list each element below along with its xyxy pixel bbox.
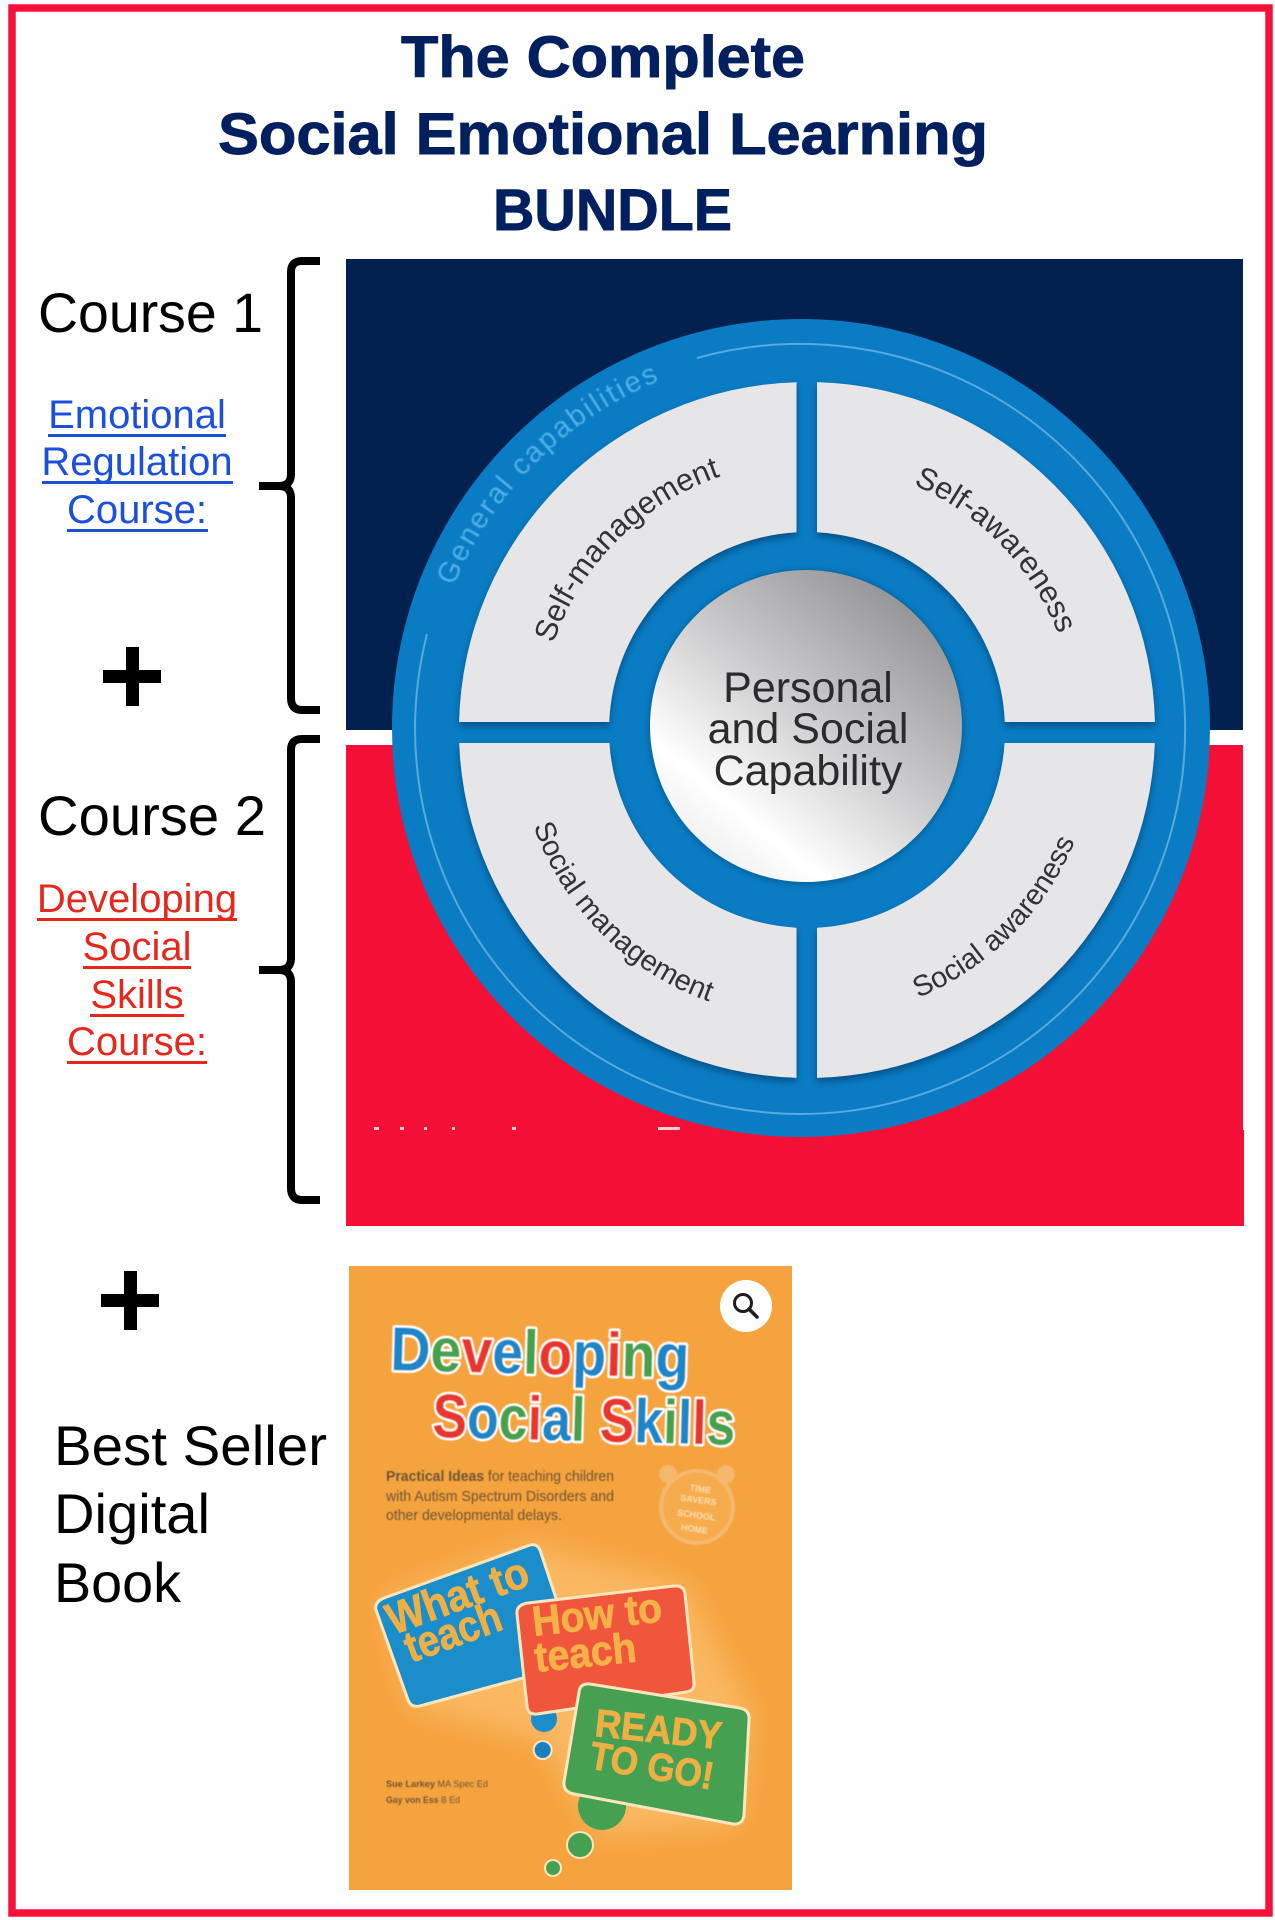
- book authors: Sue Larkey MA Spec Ed: [386, 1779, 488, 1790]
- wheel: personal and social capability: [392, 319, 1210, 1137]
- link: developing social skills course: Course:: [67, 1020, 207, 1064]
- brace: course 2: [259, 739, 320, 1200]
- blue speech bubble: teach: [398, 1592, 508, 1672]
- label: self-awareness: Self-awareness: [916, 468, 1072, 632]
- title: [218, 25, 988, 243]
- four grey quadrants: [459, 382, 1155, 1078]
- link: emotional regulation course: Emotional: [48, 393, 226, 437]
- clock badge: SCHOOL: [677, 1507, 717, 1523]
- centre text: [708, 664, 908, 795]
- link: emotional regulation course: [41, 393, 233, 532]
- course 1 label: Course 1: [38, 281, 263, 344]
- best seller digital book label: [54, 1414, 327, 1614]
- plus sign 1: [103, 647, 161, 706]
- centre disc: [648, 569, 964, 885]
- link: emotional regulation course: Regulation: [41, 440, 233, 484]
- red speech bubble: How to: [530, 1584, 664, 1645]
- best seller digital book label: Best Seller: [54, 1414, 327, 1477]
- best seller digital book label: Digital: [54, 1482, 210, 1545]
- clock badge: HOME: [680, 1522, 708, 1536]
- book subtitle: other developmental delays.: [386, 1508, 562, 1524]
- title: Social Emotional Learning: [218, 102, 988, 167]
- book title: Developing: [390, 1315, 690, 1392]
- green speech bubble: TO GO!: [586, 1735, 717, 1799]
- label: social management: Social management: [536, 822, 714, 1002]
- quadrant labels: [536, 458, 1074, 1002]
- blue speech bubble: What to: [380, 1548, 535, 1644]
- label: self-management: Self-management: [536, 458, 720, 640]
- book authors: Gay von Ess B Ed: [386, 1795, 460, 1806]
- book title: [390, 1315, 736, 1459]
- red speech bubble: teach: [532, 1624, 638, 1681]
- ring label: general capabilities: General capabilities: [438, 368, 658, 582]
- title: The Complete: [401, 25, 805, 90]
- link: developing social skills course: [37, 877, 237, 1064]
- link: developing social skills course: Social: [83, 925, 191, 969]
- book cover: [349, 1266, 792, 1890]
- best seller digital book label: Book: [54, 1551, 182, 1614]
- book subtitle: with Autism Spectrum Disorders and: [385, 1489, 614, 1505]
- plus sign 2: [101, 1271, 159, 1330]
- magnifier button: [720, 1280, 772, 1332]
- label: social awareness: Social awareness: [914, 837, 1074, 996]
- blue speech bubble: [376, 1545, 570, 1759]
- outer blue ring: [392, 319, 1210, 1137]
- clock badge: SAVERS: [680, 1493, 717, 1508]
- centre text: Personal: [723, 664, 893, 712]
- green speech bubble: [545, 1684, 749, 1876]
- centre text: and Social: [708, 705, 908, 753]
- link: emotional regulation course: Course:: [67, 488, 207, 532]
- red background panel: [346, 745, 1244, 1226]
- bubble glow: [384, 1545, 750, 1835]
- title: BUNDLE: [493, 178, 732, 243]
- course 2 label: Course 2: [38, 784, 266, 847]
- book authors: [386, 1779, 488, 1806]
- link: developing social skills course: Developing: [37, 877, 237, 921]
- centre text: Capability: [714, 747, 903, 795]
- navy background panel: [346, 259, 1243, 730]
- book subtitle: Practical Ideas for teaching children: [386, 1469, 614, 1485]
- link: developing social skills course: Skills: [90, 973, 184, 1017]
- green speech bubble: READY: [593, 1702, 724, 1758]
- clock badge: [659, 1465, 735, 1543]
- brace: course 1: [259, 261, 320, 710]
- book subtitle: [385, 1469, 614, 1524]
- red speech bubble: [517, 1584, 694, 1714]
- clock badge: TIME: [689, 1483, 712, 1495]
- book title: Social Skills: [432, 1382, 736, 1459]
- thin ring line: [415, 344, 1185, 1114]
